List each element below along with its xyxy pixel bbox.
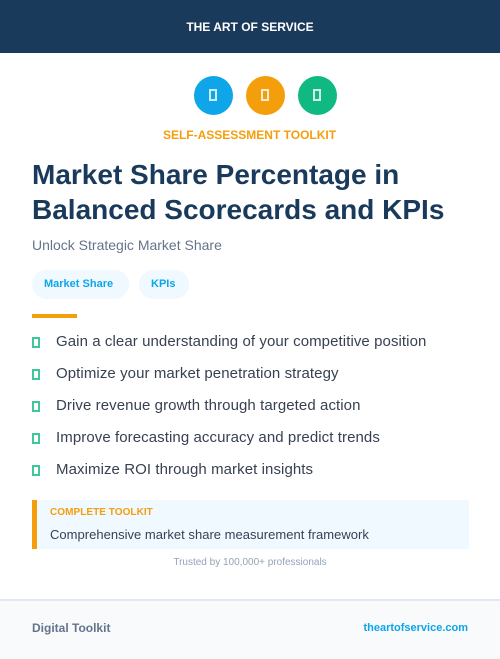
trust line: Trusted by 100,000+ professionals <box>173 557 327 568</box>
title: Balanced Scorecards and KPIs <box>32 194 444 225</box>
icon: blue circle <box>194 76 233 115</box>
header band <box>0 0 500 53</box>
tag: Market Share <box>32 270 129 299</box>
footer link: theartofservice.com <box>363 622 468 634</box>
tag: Market Share: Market Share <box>44 278 113 290</box>
tag: KPIs: KPIs <box>151 278 175 290</box>
title <box>32 159 444 225</box>
icon: green circle <box>298 76 337 115</box>
benefit 4: Improve forecasting accuracy and predict trends <box>56 429 380 446</box>
benefits list <box>32 333 426 478</box>
benefit 3: Drive revenue growth through targeted action <box>56 397 361 414</box>
title: Market Share Percentage in <box>32 159 399 190</box>
eyebrow label: SELF-ASSESSMENT TOOLKIT <box>163 128 336 142</box>
callout text: Comprehensive market share measurement framework <box>50 527 369 542</box>
callout box <box>32 500 469 549</box>
benefit 2: Optimize your market penetration strategy <box>56 365 339 382</box>
header brand name: THE ART OF SERVICE <box>186 20 314 34</box>
icon row <box>194 76 337 115</box>
benefit 5: Maximize ROI through market insights <box>56 461 313 478</box>
subtitle: Unlock Strategic Market Share <box>32 237 222 253</box>
accent divider <box>32 314 77 318</box>
icon: orange circle <box>246 76 285 115</box>
tag: KPIs <box>139 270 189 299</box>
benefit 1: Gain a clear understanding of your competitive position <box>56 333 426 350</box>
callout label: COMPLETE TOOLKIT <box>50 507 153 518</box>
footer label: Digital Toolkit <box>32 621 110 635</box>
callout accent bar <box>32 500 37 549</box>
footer band <box>0 599 500 659</box>
